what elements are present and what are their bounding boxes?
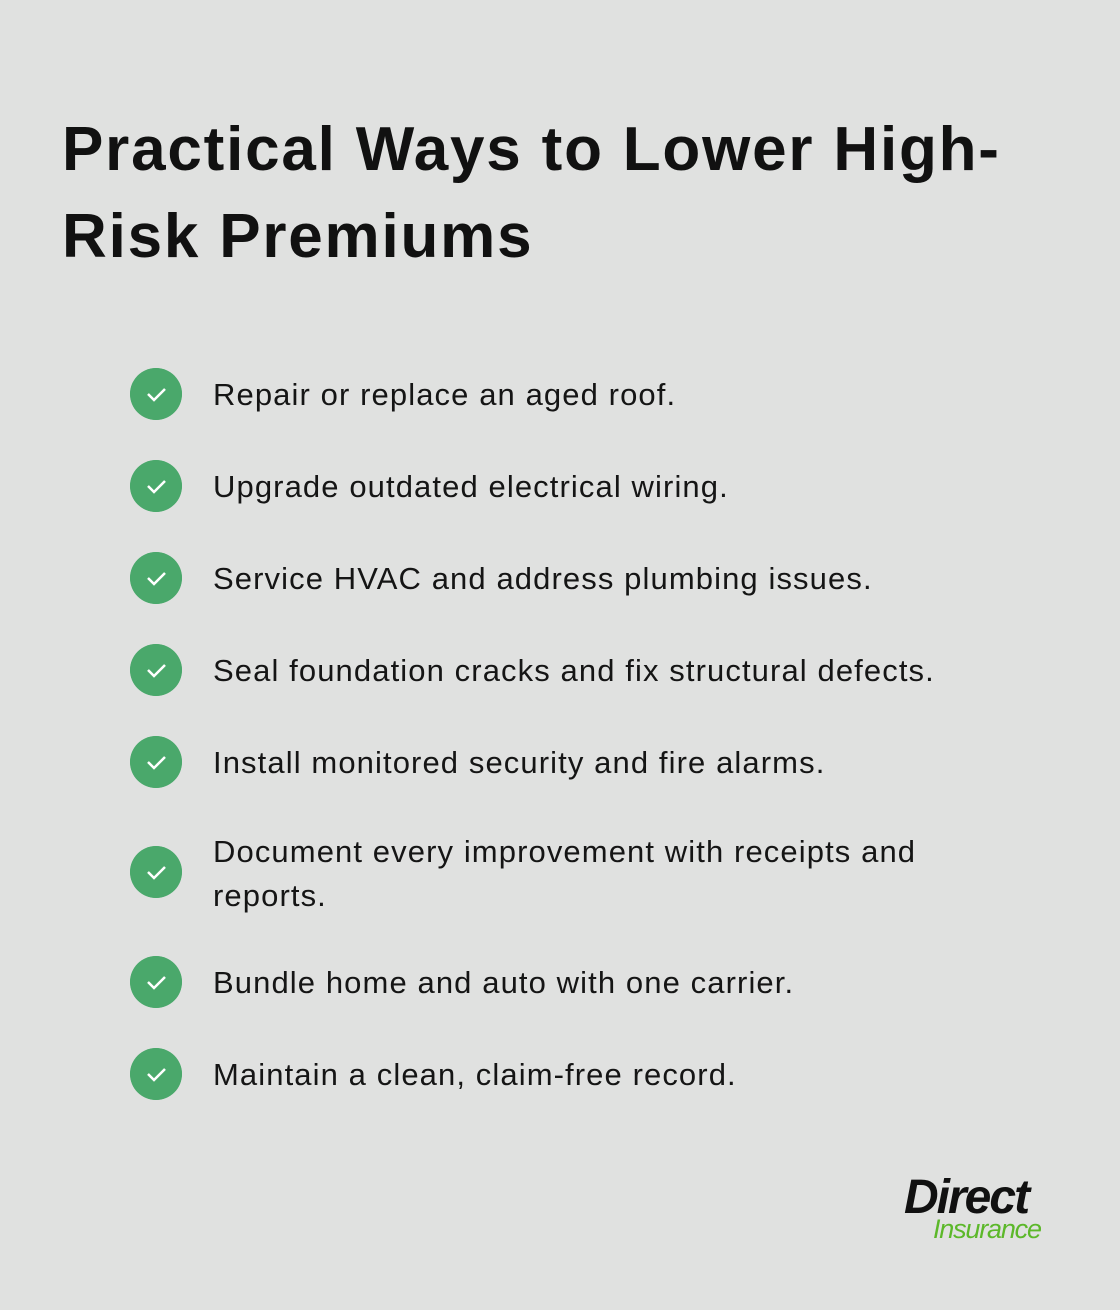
item 7: Bundle home and auto with one carrier.: [213, 965, 794, 1000]
title: Practical Ways to Lower High-: [62, 115, 1001, 184]
item 1: Repair or replace an aged roof.: [213, 377, 676, 412]
logo: Insurance: [933, 1214, 1041, 1244]
item 3: [130, 552, 873, 604]
item 6: reports.: [213, 878, 327, 913]
item 2: Upgrade outdated electrical wiring.: [213, 469, 729, 504]
item 7: [130, 956, 794, 1008]
logo: Direct: [904, 1171, 1028, 1224]
item 5: Install monitored security and fire alarms.: [213, 745, 825, 780]
item 6: Document every improvement with receipts and: [213, 834, 916, 869]
item 4: Seal foundation cracks and fix structural defects.: [213, 653, 935, 688]
title: Risk Premiums: [62, 202, 533, 271]
item 4: [130, 644, 935, 696]
item 1: [130, 368, 676, 420]
item 2: [130, 460, 729, 512]
item 5: [130, 736, 825, 788]
item 3: Service HVAC and address plumbing issues.: [213, 561, 873, 596]
item 8: Maintain a clean, claim-free record.: [213, 1057, 737, 1092]
item 6: [130, 834, 916, 913]
title: [62, 115, 1001, 271]
item 8: [130, 1048, 737, 1100]
logo: [904, 1171, 1041, 1244]
